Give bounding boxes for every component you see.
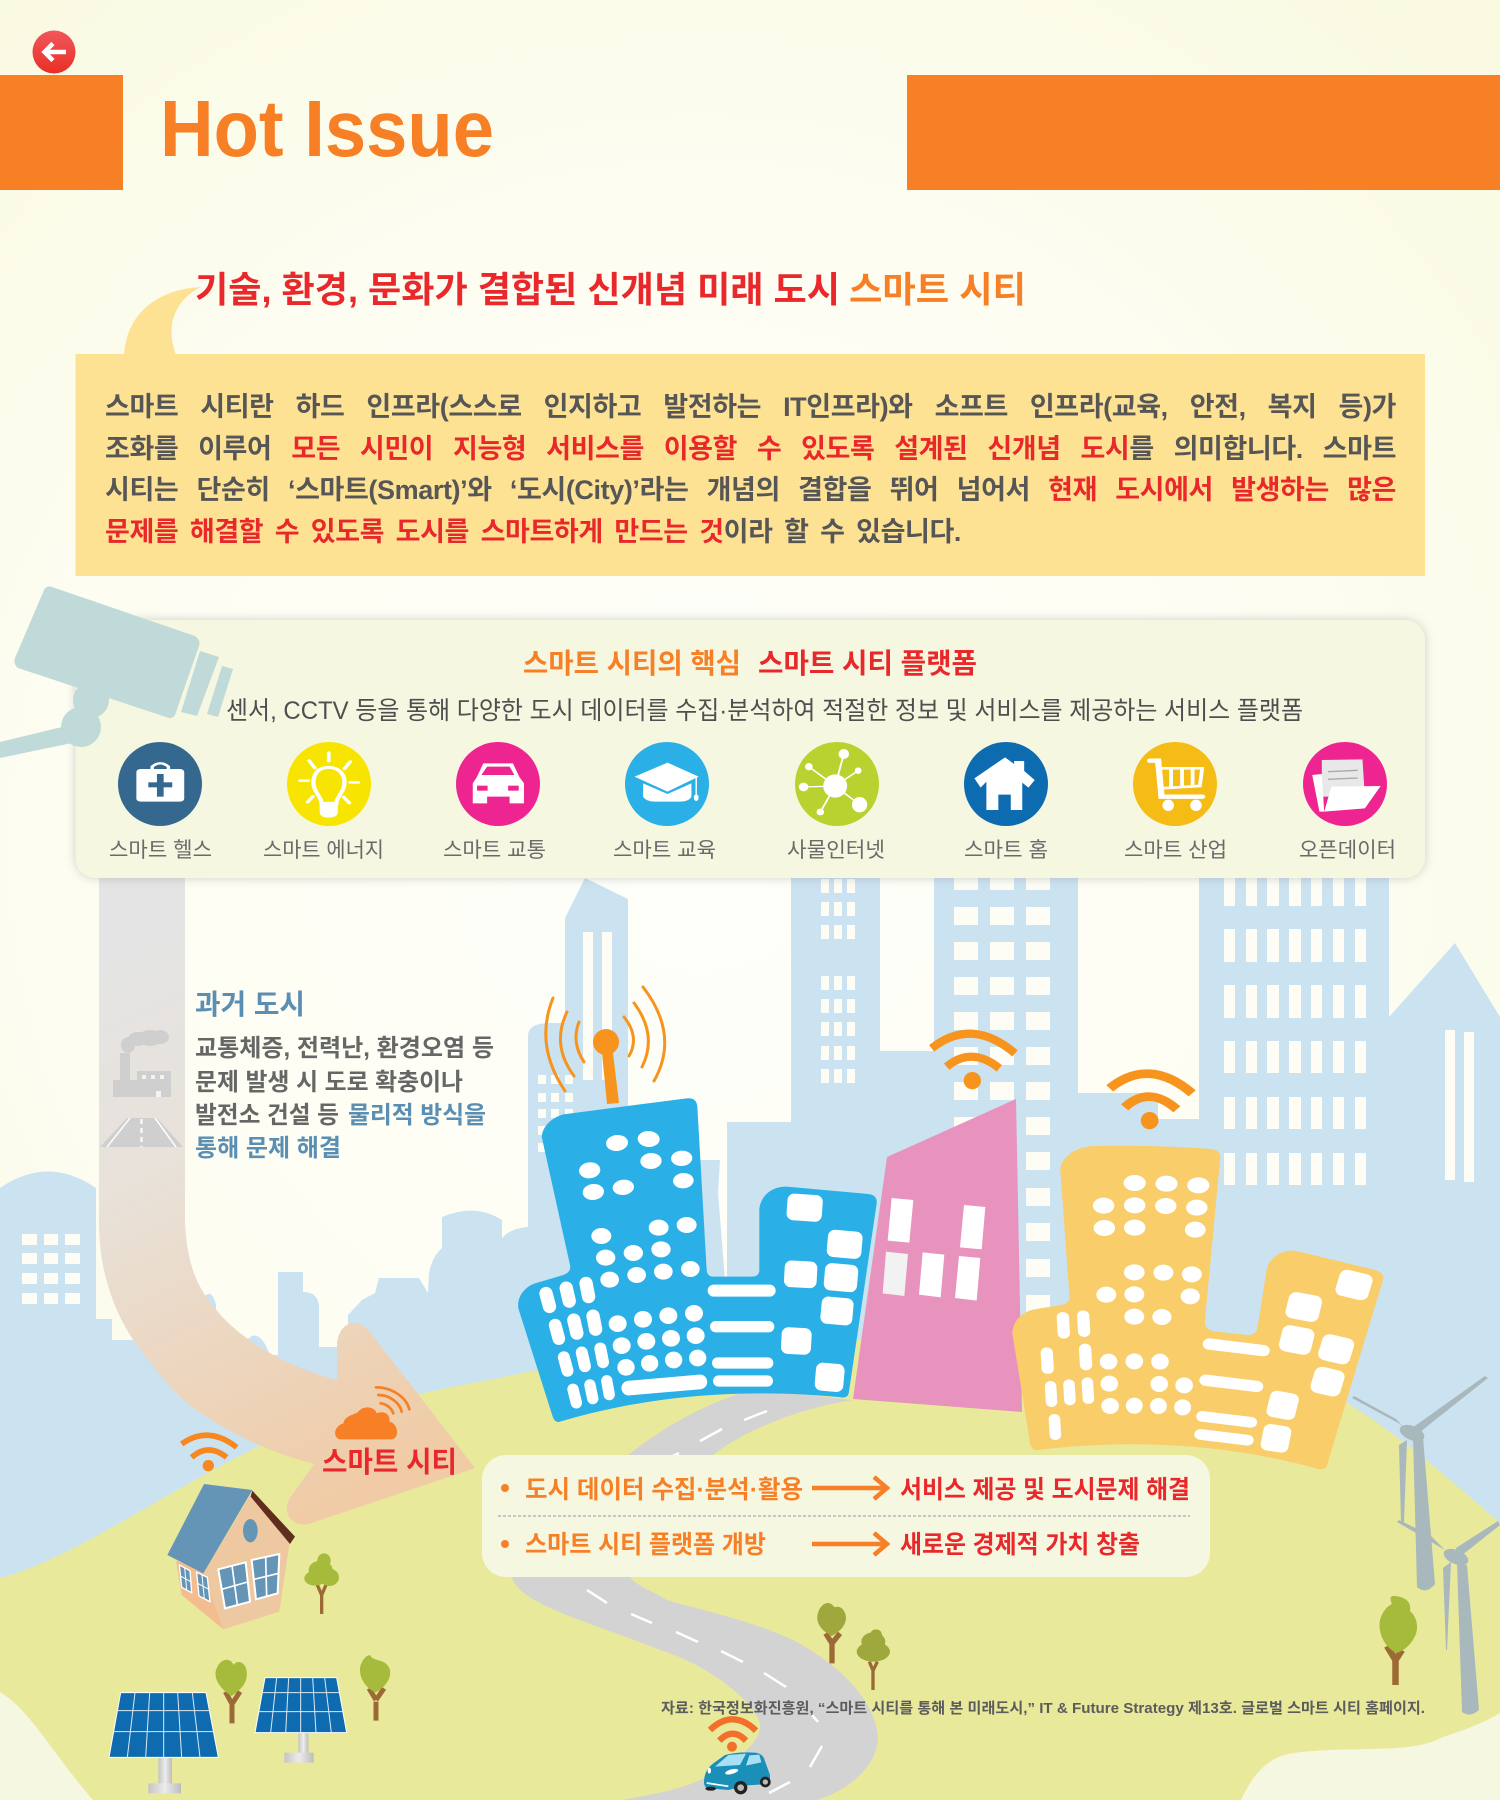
icon labels: 스마트 헬스: [109, 839, 212, 862]
callout panel: outcomes: [482, 1455, 1210, 1577]
panel heading: smart city core: [523, 648, 977, 679]
wind turbines: [1352, 1376, 1500, 1715]
icon: car: [704, 1752, 771, 1794]
icon: wifi above pink building: [932, 1034, 1015, 1089]
icon: smart education: [625, 742, 709, 826]
yellow smart building: [1012, 1146, 1383, 1469]
intro box: [76, 354, 1425, 576]
city skyline silhouette: [0, 878, 1500, 1620]
icon: small solar panel: [255, 1678, 347, 1763]
antenna signal tower: [546, 987, 665, 1104]
panel heading: smart city core: 스마트 시티의 핵심: [523, 648, 741, 679]
title: Hot Issue: [160, 84, 494, 173]
back button: [32, 30, 76, 74]
text: data collection: 도시 데이터 수집·분석·활용: [525, 1476, 803, 1504]
header block left: [0, 75, 123, 190]
past city text: 통해 문제 해결: [195, 1135, 341, 1162]
icon: smart health: [118, 742, 202, 826]
blue smart building: [518, 1098, 877, 1422]
panel: smart city platform: [76, 620, 1425, 878]
bottom-left corner shape: [0, 1692, 93, 1800]
past city text: 문제 발생 시 도로 확충이나: [195, 1069, 463, 1096]
headline: 스마트 시티: [849, 269, 1026, 310]
icon: tree right of solar panels: [360, 1655, 390, 1721]
callout tail: [124, 287, 201, 355]
arrow row 1: [812, 1477, 887, 1499]
past city text: [195, 989, 494, 1162]
divider: [498, 1515, 1190, 1517]
icon: internet of things: [795, 742, 879, 826]
icon: factory: [113, 1030, 171, 1097]
source note: 자료: 한국정보화진흥원, “스마트 시티를 통해 본 미래도시,” IT & Future Strategy 제13호. 글로벌 스마트 시티 홈페이지.: [661, 1700, 1425, 1717]
intro text line 4: 문제를 해결할 수 있도록 도시를 스마트하게 만드는 것이라 할 수 있습니다.: [105, 517, 961, 547]
icon labels: 스마트 산업: [1124, 839, 1227, 862]
arrow from past city to smart city: [99, 870, 475, 1524]
icon: smart energy: [287, 742, 371, 826]
past city text: 교통체증, 전력난, 환경오염 등: [195, 1035, 494, 1062]
icon: wifi above house: [182, 1435, 237, 1471]
icon: large solar panel: [109, 1693, 218, 1793]
intro text line 3: 시티는 단순히 ‘스마트(Smart)’와 ‘도시(City)’라는 개념의 결합을 뛰어 넘어서 현재 도시에서 발생하는 많은: [105, 475, 1396, 505]
header block right: [907, 75, 1500, 190]
icon: smart industry: [1133, 742, 1217, 826]
panel description: 센서, CCTV 등을 통해 다양한 도시 데이터를 수집·분석하여 적절한 정보 및 서비스를 제공하는 서비스 플랫폼: [226, 697, 1303, 725]
pink smart building: [853, 1099, 1022, 1412]
text: new value: 새로운 경제적 가치 창출: [900, 1531, 1140, 1559]
road: [512, 1389, 878, 1800]
headline: 기술, 환경, 문화가 결합된 신개념 미래 도시: [195, 269, 840, 310]
bullet row 2: [501, 1540, 509, 1548]
icon: open data: [1303, 742, 1387, 826]
text: platform opening: 스마트 시티 플랫폼 개방: [525, 1531, 766, 1559]
icon labels: 오픈데이터: [1299, 839, 1396, 862]
past city text: 물리적 방식을: [348, 1102, 486, 1129]
smart city label on arrow: 스마트 시티: [322, 1446, 457, 1479]
house with wifi, trees and solar panels: [109, 1387, 409, 1793]
car with wifi: [704, 1719, 771, 1794]
icon row: [118, 742, 1387, 826]
arrow row 2: [812, 1533, 887, 1555]
icon labels: 스마트 교통: [443, 839, 546, 862]
tree right: [1380, 1596, 1417, 1685]
past city text: 과거 도시: [195, 989, 305, 1020]
icon labels: 스마트 홈: [964, 839, 1048, 862]
panel heading: smart city core: 스마트 시티 플랫폼: [758, 648, 977, 679]
bullet row 1: [501, 1484, 509, 1492]
icon labels: 스마트 에너지: [263, 839, 384, 862]
text: service delivery: 서비스 제공 및 도시문제 해결: [900, 1476, 1190, 1504]
hill: [0, 1339, 1500, 1800]
icon: wifi above yellow building: [1110, 1074, 1192, 1129]
icon: road: [100, 1118, 183, 1147]
icon: tree between solar panels: [215, 1660, 247, 1723]
icon: smart traffic: [456, 742, 540, 826]
icon labels: 스마트 교육: [613, 839, 716, 862]
icon: CCTV camera: [0, 586, 233, 758]
icon: tree by house: [304, 1553, 339, 1614]
icon: house: [167, 1484, 295, 1629]
icon labels: 사물인터넷: [787, 839, 885, 862]
bottom-right corner shape: [1241, 1713, 1500, 1800]
icon: smart home: [964, 742, 1048, 826]
intro text line 1: 스마트 시티란 하드 인프라(스스로 인지하고 발전하는 IT인프라)와 소프트 인프라(교육, 안전, 복지 등)가: [105, 392, 1396, 422]
past city text: 발전소 건설 등: [195, 1102, 339, 1129]
icon labels: [109, 839, 1396, 862]
intro text line 2: 조화를 이루어 모든 시민이 지능형 서비스를 이용할 수 있도록 설계된 신개념 도시를 의미합니다. 스마트: [105, 434, 1396, 464]
icon: cloud with signal: [335, 1387, 409, 1439]
trees centre: [817, 1603, 890, 1690]
icon: wifi above car: [710, 1719, 756, 1752]
